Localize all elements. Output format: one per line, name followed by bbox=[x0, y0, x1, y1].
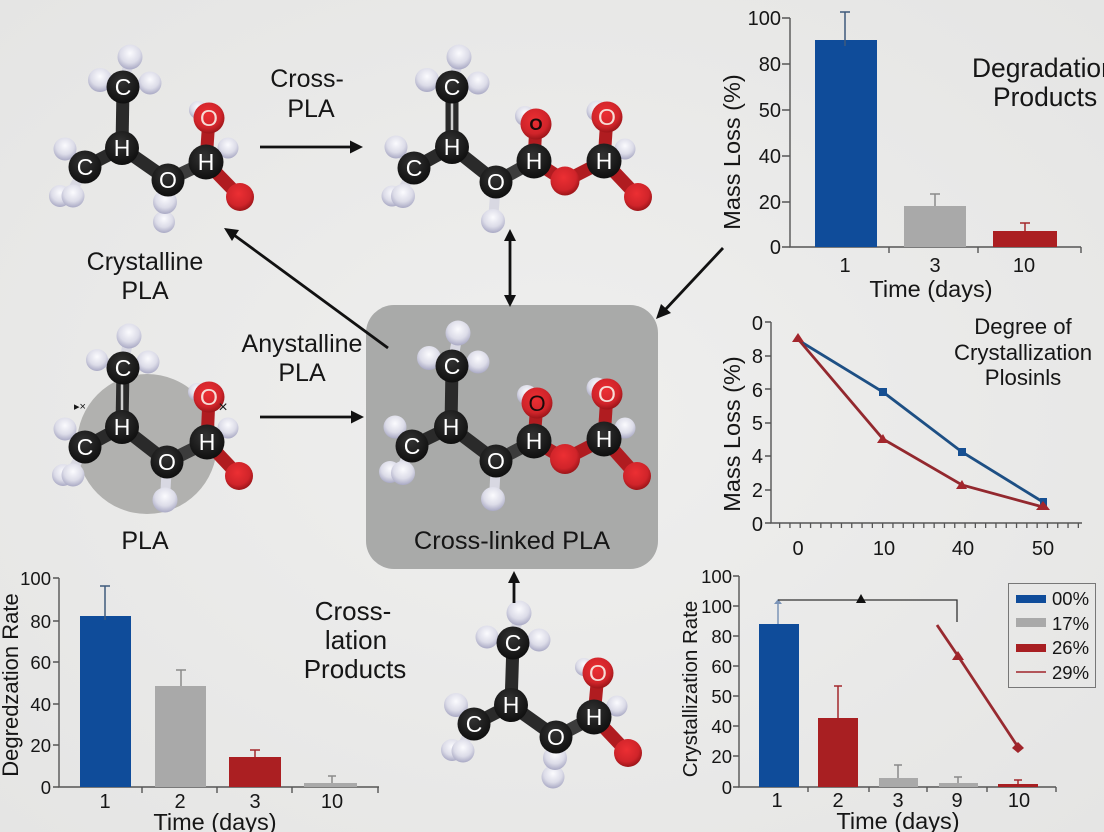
chart: degradation rate bars: 0 bbox=[41, 777, 51, 798]
gray circle behind PLA molecule bbox=[77, 374, 217, 514]
chart: crystallization line chart: 4 bbox=[752, 446, 763, 468]
chart: crystallization line chart: 6 bbox=[752, 380, 763, 402]
legend: 26% bbox=[1052, 637, 1089, 658]
molecule: cross-linked PLA center: C bbox=[404, 433, 420, 459]
chart: degradation rate bars: 3 bbox=[249, 791, 261, 813]
chart: mass loss bars: Mass Loss (%) bbox=[719, 74, 745, 230]
panel: cross-linked PLA bbox=[366, 305, 658, 569]
molecule: cross-linked PLA center: H bbox=[526, 428, 542, 454]
label: Anystalline PLA: Anystalline bbox=[242, 330, 362, 358]
label: Crystalline PLA: Crystalline bbox=[87, 248, 203, 276]
chart: mass loss bars: 40 bbox=[759, 146, 781, 168]
chart: mass loss bars: 1 bbox=[839, 255, 851, 277]
arrow: panel to crystalline bbox=[224, 228, 388, 348]
chart: crystallization rate bars: 0 bbox=[722, 777, 732, 798]
molecule: PLA left: C bbox=[115, 355, 131, 381]
chart: crystallization line chart: Degree of bbox=[974, 314, 1073, 339]
chart: mass loss bars: 3 bbox=[929, 255, 941, 277]
molecule: cross-PLA top: H bbox=[444, 134, 460, 160]
arrow: from mass loss chart bbox=[656, 248, 723, 319]
molecule: cross-PLA top: O bbox=[487, 169, 505, 195]
chart: crystallization line chart: 0 bbox=[752, 313, 763, 335]
chart: crystallization rate bars: 60 bbox=[711, 656, 732, 677]
label: Anystalline PLA: PLA bbox=[278, 359, 326, 387]
molecule: crystalline PLA: C bbox=[77, 154, 93, 180]
chart: degradation rate bars bbox=[0, 568, 379, 832]
molecule: bottom: C bbox=[466, 711, 482, 737]
molecule: PLA left: C bbox=[77, 434, 93, 460]
molecule: cross-PLA top: O bbox=[598, 104, 616, 130]
label: Cross-lation Products: Cross- bbox=[315, 596, 391, 626]
chart: mass loss bars: 80 bbox=[759, 54, 781, 76]
label: Cross-lation Products: lation bbox=[325, 625, 387, 655]
chart: mass loss bars: Time (days) bbox=[869, 276, 993, 302]
molecule: PLA left: O bbox=[200, 384, 218, 410]
legend: 00% bbox=[1052, 588, 1089, 609]
molecule: crystalline PLA: O bbox=[159, 167, 177, 193]
molecule: bottom: O bbox=[547, 724, 565, 750]
molecule: cross-PLA top: C bbox=[406, 155, 422, 181]
chart: crystallization line chart: 50 bbox=[1032, 538, 1054, 560]
molecule: PLA left bbox=[52, 324, 253, 512]
chart: degradation rate bars: 40 bbox=[30, 694, 51, 715]
arrow: top horizontal bbox=[260, 140, 363, 154]
chart: crystallization rate bars: 3 bbox=[892, 790, 904, 812]
molecule: PLA left: × bbox=[218, 399, 228, 416]
molecule: bottom: H bbox=[586, 704, 602, 730]
chart: mass loss bars: 50 bbox=[759, 100, 781, 122]
chart: crystallization line chart: Mass Loss (%) bbox=[719, 356, 745, 512]
arrow: PLA to panel bbox=[260, 410, 364, 424]
molecule: cross-PLA top: H bbox=[526, 148, 542, 174]
molecule: bottom bbox=[441, 600, 642, 788]
label: Cross-lation Products: Products bbox=[304, 654, 406, 684]
molecule: PLA left: H bbox=[199, 429, 215, 455]
molecule: crystalline PLA bbox=[49, 44, 254, 233]
chart: crystallization line chart: 10 bbox=[873, 538, 895, 560]
molecule: cross-PLA top bbox=[382, 44, 652, 233]
label: Cross-linked PLA: Cross-linked PLA bbox=[414, 527, 610, 555]
chart: crystallization line chart bbox=[719, 313, 1092, 560]
legend: 29% bbox=[1052, 662, 1089, 683]
arrow: bottom upward bbox=[508, 571, 520, 603]
molecule: bottom: O bbox=[589, 660, 607, 686]
chart: crystallization line chart: 5 bbox=[752, 413, 763, 435]
molecule: bottom: H bbox=[503, 692, 519, 718]
label: Cross-PLA: Cross- bbox=[270, 65, 344, 93]
molecule: crystalline PLA: H bbox=[114, 135, 130, 161]
molecule: PLA left: O bbox=[158, 449, 176, 475]
arrow: double vertical bbox=[504, 229, 516, 307]
chart: crystallization line chart: Plosinls bbox=[985, 365, 1061, 390]
chart: degradation rate bars: 100 bbox=[20, 568, 51, 589]
chart: degradation rate bars: 1 bbox=[99, 791, 111, 813]
chart: crystallization line chart: 2 bbox=[752, 480, 763, 502]
molecule: cross-linked PLA center: C bbox=[444, 353, 460, 379]
molecule: crystalline PLA: H bbox=[198, 149, 214, 175]
chart: crystallization rate bars: 50 bbox=[711, 686, 732, 707]
chart: degradation rate bars: 80 bbox=[30, 611, 51, 632]
molecule: cross-PLA top: C bbox=[444, 74, 460, 100]
molecule: cross-linked PLA center: H bbox=[596, 426, 612, 452]
chart: mass loss bars: 0 bbox=[770, 237, 781, 259]
molecule: PLA left: ▸× bbox=[74, 401, 86, 413]
molecule: cross-PLA top: O bbox=[529, 115, 543, 134]
chart: crystallization rate bars: 9 bbox=[951, 790, 963, 812]
chart: crystallization rate bars: 100 bbox=[701, 596, 732, 617]
chart: crystallization line chart: 40 bbox=[952, 538, 974, 560]
chart: crystallization rate bars: 2 bbox=[832, 790, 844, 812]
legend: 17% bbox=[1052, 613, 1089, 634]
chart: mass loss bars: 100 bbox=[748, 8, 781, 30]
chart: degradation rate bars: 2 bbox=[174, 791, 186, 813]
molecule: cross-linked PLA center: O bbox=[598, 381, 616, 407]
molecule: cross-linked PLA center bbox=[379, 320, 651, 511]
chart: mass loss bars: 20 bbox=[759, 192, 781, 214]
molecule: cross-linked PLA center: O bbox=[487, 448, 505, 474]
chart: degradation rate bars: 10 bbox=[321, 791, 343, 813]
chart: crystallization line chart: 0 bbox=[792, 538, 804, 560]
label: Degradation Products: Products bbox=[993, 82, 1097, 112]
chart: degradation rate bars: 20 bbox=[30, 735, 51, 756]
chart: crystallization rate bars: 100 bbox=[701, 566, 732, 587]
molecule: crystalline PLA: O bbox=[200, 105, 218, 131]
molecule: cross-PLA top: H bbox=[596, 148, 612, 174]
chart: crystallization rate bars: Crystallization Rate bbox=[679, 601, 702, 777]
chart: crystallization line chart: 8 bbox=[752, 346, 763, 368]
chart: crystallization rate bars: 10 bbox=[1008, 790, 1030, 812]
chart: degradation rate bars: 60 bbox=[30, 652, 51, 673]
chart: crystallization rate bars: 1 bbox=[771, 790, 783, 812]
chart: crystallization rate bars bbox=[679, 566, 1056, 832]
molecule: crystalline PLA: C bbox=[115, 74, 131, 100]
chart: mass loss bars: 10 bbox=[1013, 255, 1035, 277]
molecule: bottom: C bbox=[505, 630, 521, 656]
molecule: cross-linked PLA center: O bbox=[528, 391, 546, 416]
chart: crystallization line chart: Crystallization bbox=[954, 340, 1092, 365]
label: PLA: PLA bbox=[121, 527, 169, 555]
label: Cross-PLA: PLA bbox=[287, 95, 335, 123]
chart: crystallization line chart: 0 bbox=[752, 514, 763, 536]
chart: mass loss bars bbox=[719, 8, 1081, 302]
legend bbox=[1008, 584, 1096, 688]
molecule: cross-linked PLA center: H bbox=[443, 414, 459, 440]
chart: crystallization rate bars: 80 bbox=[711, 626, 732, 647]
chart: crystallization rate bars: 40 bbox=[711, 716, 732, 737]
chart: crystallization rate bars: 20 bbox=[711, 746, 732, 767]
label: Crystalline PLA: PLA bbox=[121, 277, 169, 305]
molecule: PLA left: H bbox=[114, 414, 130, 440]
